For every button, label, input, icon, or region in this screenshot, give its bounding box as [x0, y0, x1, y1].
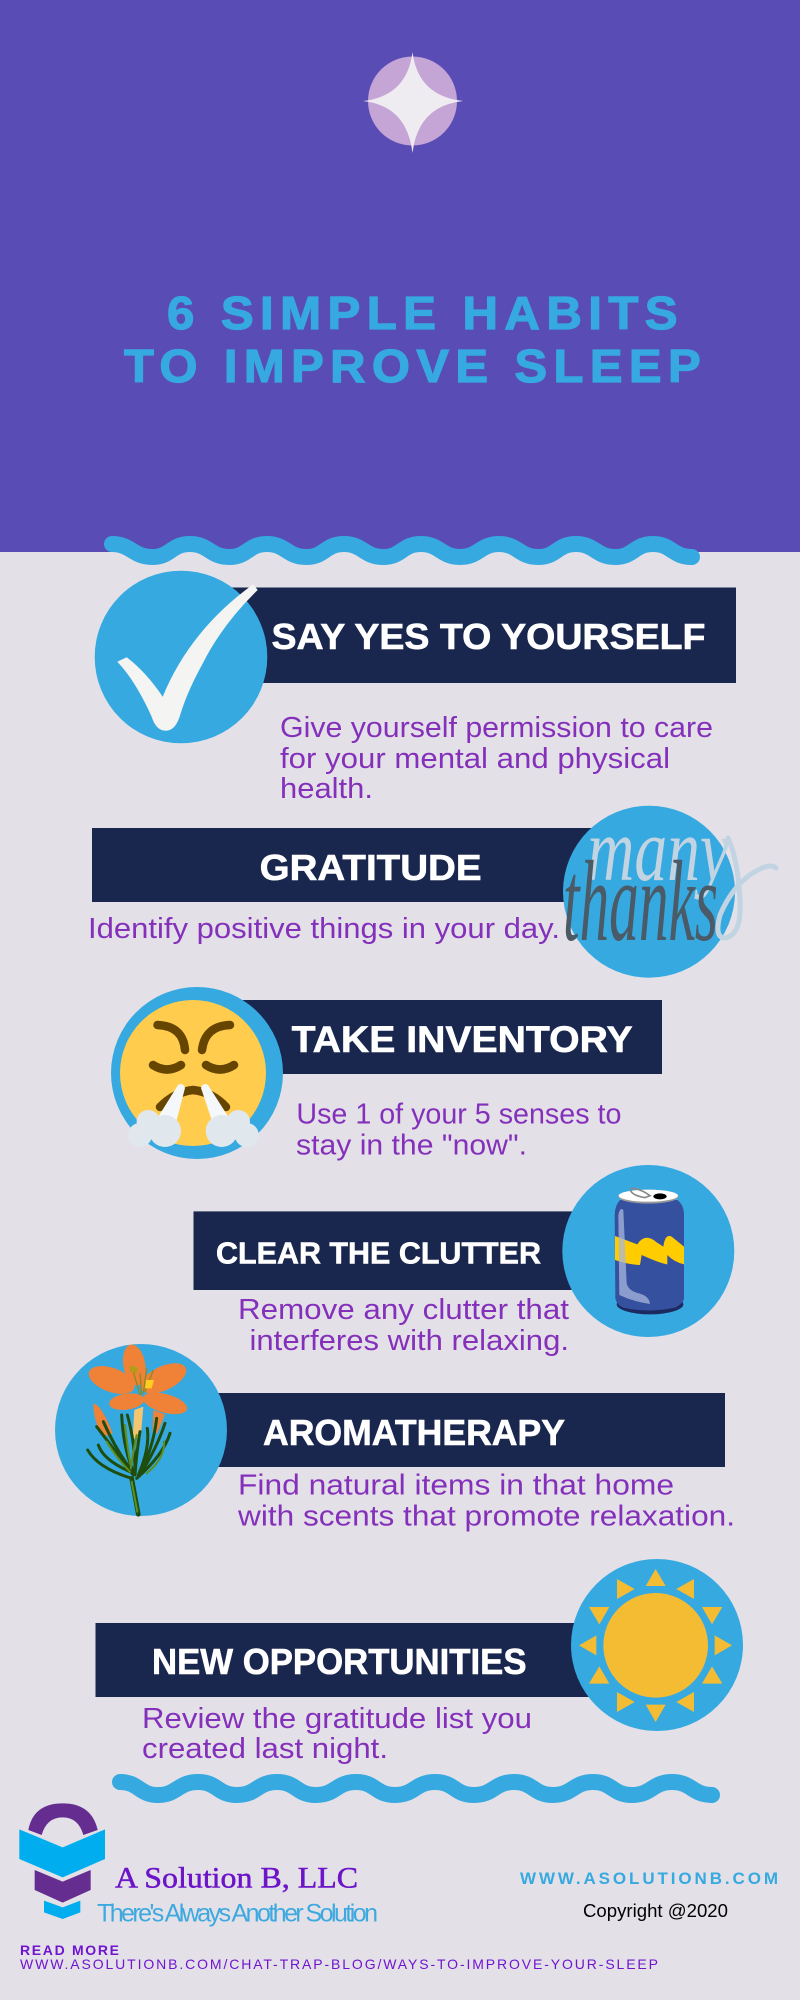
heading: AROMATHERAPY — [263, 1412, 565, 1453]
heading bar — [220, 1000, 662, 1074]
heading bar — [194, 1211, 624, 1290]
icon: company logo — [19, 1803, 105, 1919]
top wave divider — [112, 544, 692, 557]
read more link: READ MORE — [20, 1942, 119, 1958]
bottom wave divider — [120, 1782, 712, 1795]
heading: CLEAR THE CLUTTER — [216, 1236, 541, 1271]
body text — [237, 1470, 735, 1532]
header panel — [0, 0, 800, 552]
icon: soda can — [562, 1165, 734, 1337]
body text: created last night. — [142, 1733, 388, 1765]
heading bar — [96, 1623, 626, 1697]
footer — [19, 1803, 778, 1972]
icon: many thanks circle: many — [587, 801, 729, 900]
heading: TAKE INVENTORY — [292, 1019, 633, 1060]
tagline: There's Always Another Solution — [97, 1900, 378, 1928]
heading: GRATITUDE — [260, 847, 482, 888]
icon: sun — [571, 1559, 743, 1731]
copyright: Copyright @2020 — [583, 1901, 728, 1921]
read more link — [20, 1942, 658, 1972]
body text: for your mental and physical — [280, 743, 670, 775]
icon: many thanks circle — [563, 801, 776, 978]
title — [124, 287, 707, 392]
body text — [238, 1294, 569, 1357]
body text: Find natural items in that home — [238, 1470, 674, 1502]
panel: clear the clutter — [194, 1165, 734, 1357]
heading: NEW OPPORTUNITIES — [152, 1641, 526, 1682]
panel: new opportunities — [96, 1559, 743, 1765]
body text: with scents that promote relaxation. — [237, 1500, 735, 1532]
body text: stay in the "now". — [296, 1130, 527, 1162]
company name: A Solution B, LLC — [115, 1862, 358, 1895]
icon: orange flower — [55, 1343, 227, 1516]
icon: sparkle star in circle — [363, 52, 463, 153]
icon: huffing face emoji — [111, 987, 283, 1159]
body text: Give yourself permission to care — [280, 712, 713, 744]
body text: health. — [280, 773, 373, 805]
body text: Use 1 of your 5 senses to — [296, 1099, 621, 1131]
body text: Identify positive things in your day. — [88, 913, 560, 945]
body text: Review the gratitude list you — [142, 1703, 532, 1735]
body text — [296, 1099, 621, 1162]
read more link: WWW.ASOLUTIONB.COM/CHAT-TRAP-BLOG/WAYS-TO-IMPROVE-YOUR-SLEEP — [20, 1956, 658, 1972]
panel: say yes to yourself — [95, 571, 736, 805]
heading bar — [200, 588, 736, 683]
body text — [142, 1703, 532, 1765]
website: WWW.ASOLUTIONB.COM — [520, 1869, 778, 1888]
body text — [280, 712, 713, 805]
heading bar — [200, 1393, 725, 1467]
body text: Remove any clutter that — [238, 1294, 569, 1326]
title: 6 SIMPLE HABITS — [167, 287, 684, 339]
heading: SAY YES TO YOURSELF — [272, 616, 706, 657]
panel: aromatherapy — [55, 1343, 735, 1532]
panel: take inventory — [111, 987, 662, 1162]
body text: interferes with relaxing. — [250, 1325, 569, 1357]
heading bar — [92, 828, 622, 902]
icon: check mark circle — [95, 571, 267, 743]
title: TO IMPROVE SLEEP — [124, 340, 707, 392]
panel: gratitude — [88, 801, 776, 978]
